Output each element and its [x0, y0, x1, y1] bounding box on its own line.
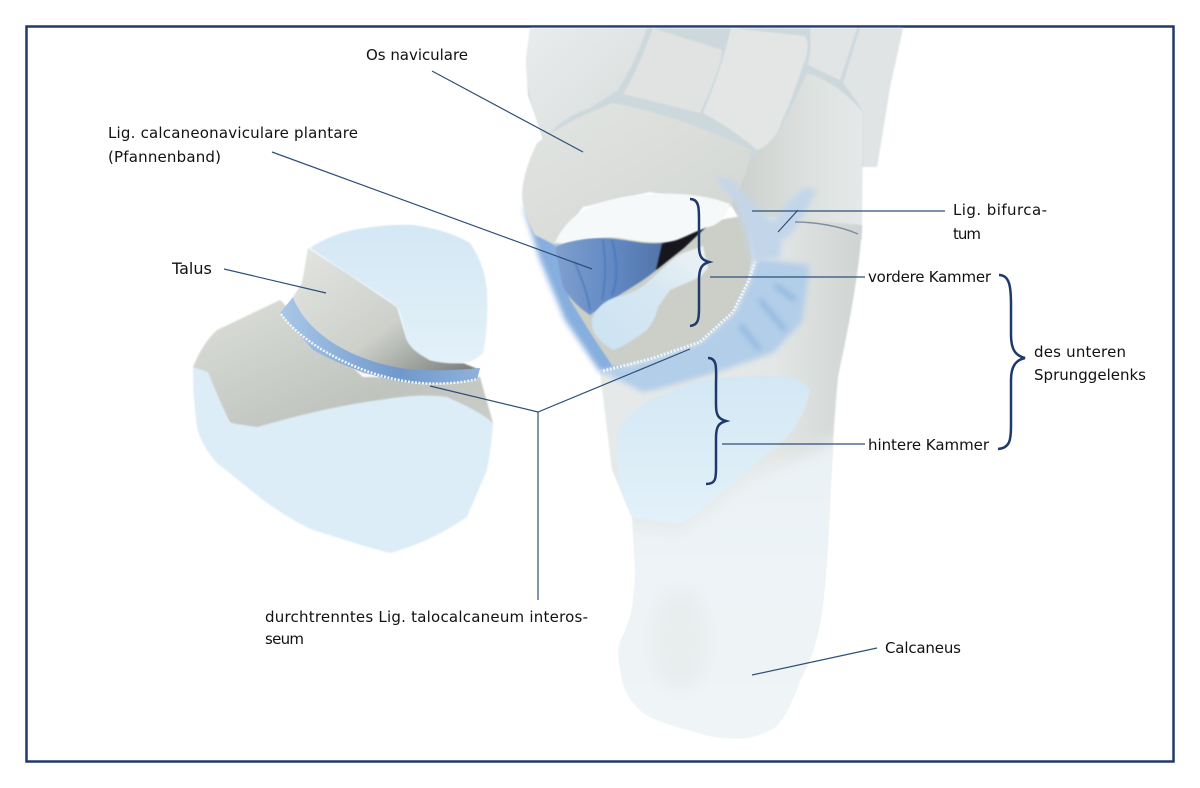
posterior calcaneal facet	[617, 376, 810, 523]
label: Os naviculare: Os naviculare	[366, 46, 468, 64]
label: des unteren Sprunggelenks	[1034, 343, 1146, 384]
calcaneocuboid joint line	[795, 222, 858, 234]
label: durchtrenntes Lig. talocalcaneum interosseum: durchtrenntes Lig. talocalcaneum interos-	[265, 608, 588, 626]
label: Lig. calcaneonaviculare plantare: (Pfannenband)	[108, 148, 221, 166]
os naviculare	[522, 103, 750, 245]
talus body grey	[193, 300, 493, 440]
label: durchtrenntes Lig. talocalcaneum interosseum	[265, 608, 588, 648]
label: Talus: Talus	[171, 259, 212, 278]
label: durchtrenntes Lig. talocalcaneum interosseum: seum	[265, 630, 304, 648]
label: vordere Kammer: vordere Kammer	[868, 268, 992, 286]
talus body cartilage	[193, 367, 493, 553]
interosseous ligament band	[603, 258, 810, 392]
dark cavity	[656, 226, 707, 270]
illustration: talus	[193, 225, 493, 553]
cuboid bone	[725, 73, 863, 240]
label: des unteren Sprunggelenks: des unteren	[1034, 343, 1126, 361]
talus neck	[293, 248, 480, 382]
label: Lig. calcaneonaviculare plantare	[108, 124, 358, 166]
label: Lig. bifurcatum: Lig. bifurca-	[953, 201, 1047, 219]
label: Lig. bifurcatum: tum	[953, 225, 981, 243]
label: Calcaneus: Calcaneus	[885, 639, 961, 657]
socket surface	[555, 215, 752, 367]
anterior calcaneal facet	[592, 246, 708, 350]
calcaneus	[600, 215, 862, 738]
medial ligament strip	[523, 205, 625, 372]
metatarsal and cuneiform bones	[526, 28, 903, 185]
navicular articular facet	[555, 194, 730, 243]
cut ligament surface	[280, 297, 480, 384]
label: des unteren Sprunggelenks: Sprunggelenks	[1034, 366, 1146, 384]
lig. plantare (Pfannenband)	[555, 226, 707, 315]
label: Lig. calcaneonaviculare plantare: Lig. calcaneonaviculare plantare	[108, 124, 358, 142]
heel lower part	[620, 438, 832, 738]
illustration: foot bones	[522, 28, 903, 760]
brace: vordere Kammer	[690, 199, 709, 326]
talus upper facet	[310, 225, 487, 363]
brace: hintere Kammer	[706, 358, 726, 484]
lig. bifurcatum	[715, 178, 818, 262]
leader lines	[224, 71, 945, 675]
label: Lig. bifurcatum	[953, 201, 1047, 243]
brace: des unteren Sprunggelenks	[998, 275, 1025, 449]
label: hintere Kammer: hintere Kammer	[868, 436, 990, 454]
